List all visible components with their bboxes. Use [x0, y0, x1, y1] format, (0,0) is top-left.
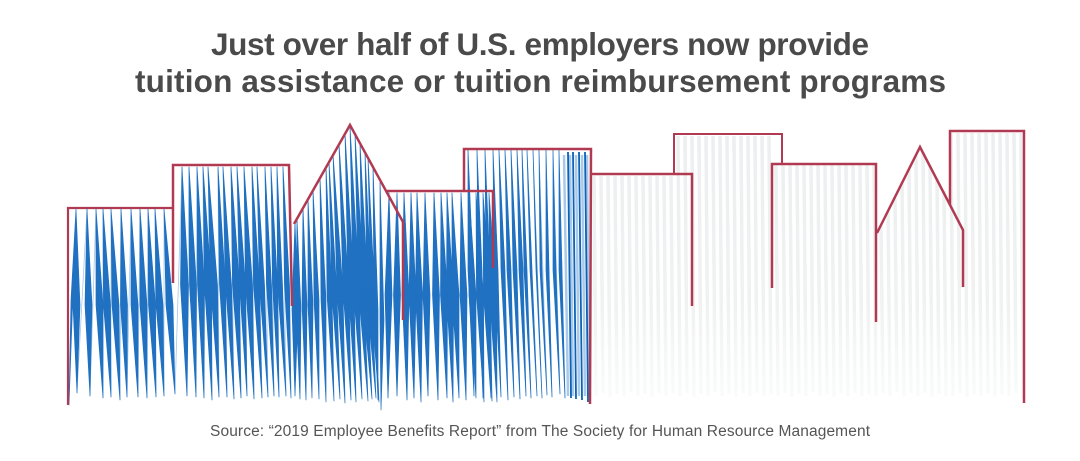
- blue building 2: [180, 167, 291, 400]
- grey building 10: [951, 133, 1023, 398]
- outline building 4: [387, 191, 493, 268]
- outline building 5: [464, 149, 591, 404]
- return strokes of the blue hatching: [77, 150, 565, 402]
- outline building 6: [591, 174, 692, 306]
- grey building 6: [594, 176, 673, 397]
- outline building 3: [294, 125, 403, 320]
- filled skyline: blue hatching: [69, 126, 565, 410]
- skyline chart: [68, 125, 1024, 410]
- outline building 8: [772, 164, 876, 322]
- pale blue strokes near the blue edge: [564, 155, 589, 396]
- red building outlines: [68, 125, 1024, 405]
- outline building 1: [68, 208, 172, 405]
- source note: Source: “2019 Employee Benefits Report” from The Society for Human Resource Management: [210, 423, 871, 440]
- blue building 4: [385, 193, 497, 402]
- blue building 3: [292, 126, 384, 410]
- blue building 5: [468, 150, 565, 401]
- title line 2: tuition assistance or tuition reimbursement programs: [135, 63, 946, 99]
- outline building 2: [173, 165, 292, 306]
- title line 1: Just over half of U.S. employers now provide: [211, 26, 869, 62]
- unfilled skyline: grey hatching: [594, 133, 1023, 398]
- blue building 5 thin strokes: [568, 152, 588, 402]
- grey building 8: [776, 165, 876, 397]
- outline building 7: [674, 134, 782, 174]
- grey building 9: [881, 152, 946, 397]
- outline building 9: [877, 147, 963, 287]
- grey building 7: [678, 136, 771, 397]
- title: [135, 26, 946, 99]
- outline building 10: [950, 131, 1024, 403]
- blue building 1: [69, 209, 175, 405]
